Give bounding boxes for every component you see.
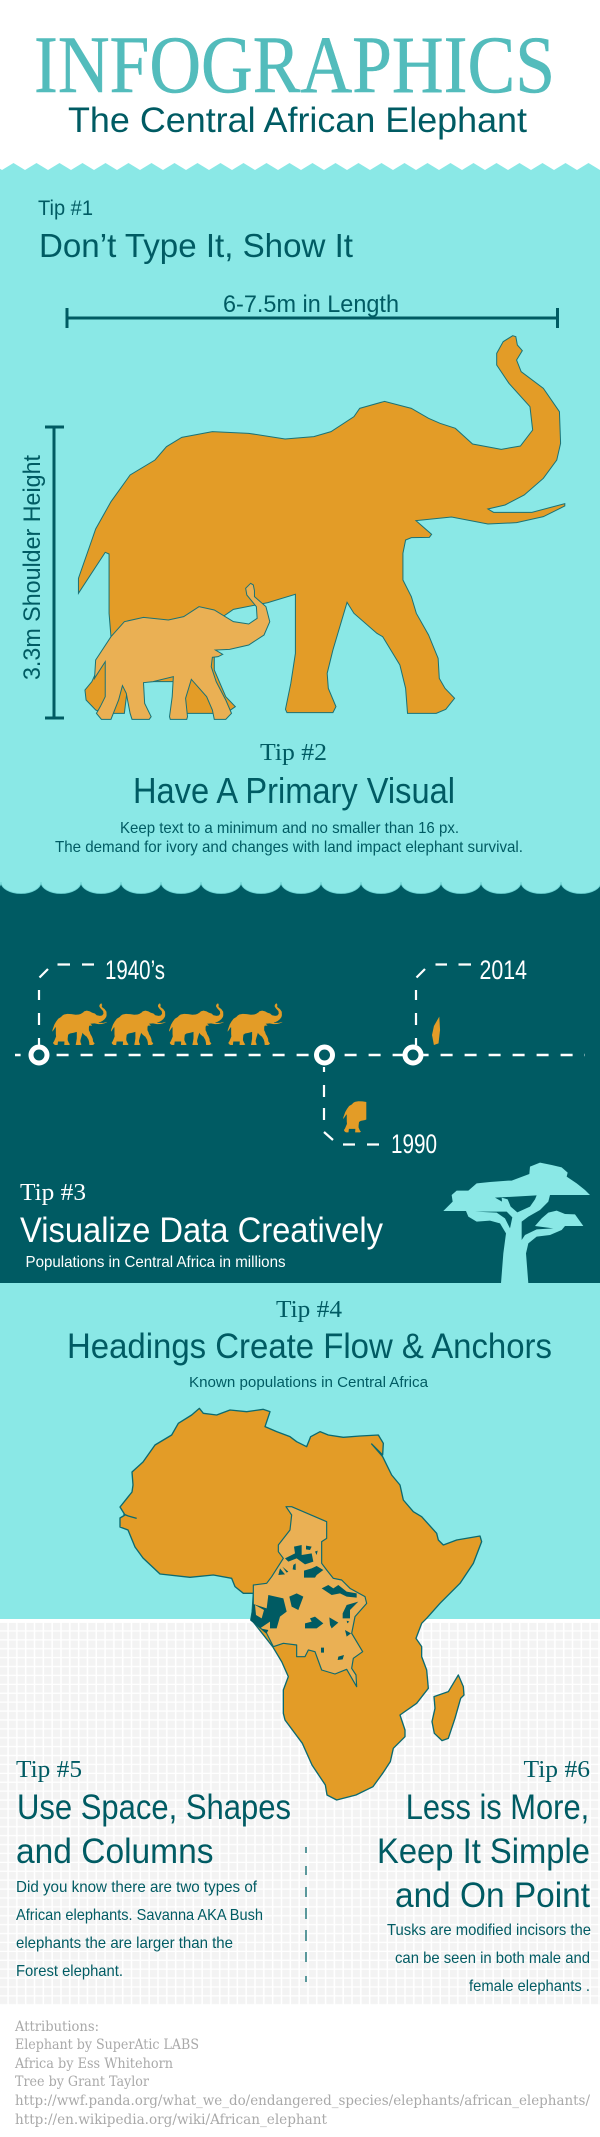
tip 4 heading: Headings Create Flow & Anchors — [67, 1327, 552, 1366]
tip 6 body: can be seen in both male and — [395, 1950, 590, 1967]
attributions: Tree by Grant Taylor — [15, 2074, 149, 2090]
label: 1990: 1990 — [391, 1129, 437, 1159]
map: Madagascar — [432, 1675, 464, 1741]
map: Africa — [120, 1408, 482, 1800]
column divider — [305, 1847, 307, 1982]
map: continent — [120, 1408, 482, 1800]
tip 1 heading: Don’t Type It, Show It — [39, 227, 353, 264]
tip 4 body: Known populations in Central Africa — [189, 1374, 429, 1391]
icon: acacia tree — [443, 1163, 590, 1283]
tip 5 heading: Use Space, Shapes — [17, 1788, 291, 1827]
tip 3 body: Populations in Central Africa in millions — [26, 1254, 286, 1271]
tip 5 heading: and Columns — [16, 1832, 214, 1871]
leader: 1940s — [39, 964, 94, 1045]
marker: 1940s — [31, 1047, 47, 1063]
leader: 2014 — [416, 964, 471, 1045]
panel: tip 2 — [55, 740, 523, 856]
tip 6 heading: and On Point — [395, 1876, 590, 1915]
panel: grid background — [0, 1623, 600, 2005]
map: elephant population areas — [251, 1545, 358, 1660]
tip 3 label: Tip #3 — [20, 1180, 86, 1206]
chart: population timeline — [15, 955, 585, 1159]
tip 6 heading: Keep It Simple — [377, 1832, 590, 1871]
panel: tip 1 — [19, 197, 558, 718]
tip 5 body — [16, 1879, 263, 1980]
panel: tip 5 — [16, 1757, 291, 1980]
length label: 6-7.5m in Length — [223, 291, 399, 318]
subtitle: The Central African Elephant — [68, 101, 527, 140]
label: 1940s: 1940’s — [105, 955, 165, 985]
attributions — [14, 2019, 590, 2128]
icons: 1940s elephants — [52, 1003, 282, 1045]
map: central Africa region — [251, 1507, 367, 1687]
attributions: Africa by Ess Whitehorn — [14, 2056, 173, 2072]
attributions: Elephant by SuperAtic LABS — [15, 2037, 199, 2053]
tip 6 label: Tip #6 — [524, 1757, 590, 1783]
tip 2 heading: Have A Primary Visual — [133, 770, 455, 811]
length arrow — [67, 308, 558, 328]
tip 5 body: African elephants. Savanna AKA Bush — [16, 1907, 263, 1924]
attributions: Attributions: — [14, 2019, 99, 2035]
tip 2 body — [55, 820, 523, 856]
white band across the page behind the map — [0, 1619, 600, 1623]
panel: tip 6 — [377, 1757, 591, 1995]
panel: tip 3 — [20, 1180, 383, 1271]
marker: 2014 — [405, 1047, 421, 1063]
tip 6 body — [387, 1922, 591, 1995]
tip 4 label: Tip #4 — [276, 1297, 342, 1323]
map: Gambia river line — [123, 1514, 137, 1518]
tip 2 body: The demand for ivory and changes with land impact elephant survival. — [55, 839, 523, 856]
icon: 2014 partial elephant — [432, 1017, 440, 1045]
icon: 1990 partial elephant — [343, 1101, 366, 1132]
tip 5 body: Forest elephant. — [16, 1963, 123, 1980]
tip 5 label: Tip #5 — [16, 1757, 82, 1783]
height arrow — [45, 427, 64, 718]
marker: 1990 — [316, 1047, 332, 1063]
icon: adult elephant — [78, 336, 565, 713]
panel: tip 4 — [67, 1297, 552, 1391]
tip 5 heading — [16, 1788, 291, 1871]
tip 6 heading — [377, 1788, 590, 1915]
timeline axis — [15, 1054, 585, 1056]
chart: elephant size comparison — [78, 336, 565, 719]
attributions: http://wwf.panda.org/what_we_do/endangered_species/elephants/african_elephants/ — [15, 2093, 590, 2109]
label: 2014: 2014 — [480, 955, 527, 985]
tip 5 body: elephants the are larger than the — [16, 1935, 233, 1952]
leader: 1990 — [324, 1067, 379, 1144]
attributions: http://en.wikipedia.org/wiki/African_elephant — [15, 2112, 327, 2128]
panel: dark timeline background — [0, 881, 600, 1283]
tip 6 body: female elephants . — [469, 1978, 590, 1995]
tip 3 heading: Visualize Data Creatively — [20, 1211, 383, 1250]
shoulder height label: 3.3m Shoulder Height — [19, 455, 46, 680]
tip 5 body: Did you know there are two types of — [16, 1879, 258, 1896]
panel: light teal tips 1 and 2 background — [0, 163, 600, 882]
panel: light teal map background — [0, 1283, 600, 1619]
panel: header — [34, 19, 555, 140]
map: light gap inside the largest area — [255, 1605, 264, 1618]
icon: baby elephant — [95, 583, 270, 719]
tip 2 label: Tip #2 — [260, 740, 327, 766]
tip 1 label: Tip #1 — [38, 197, 93, 220]
tip 2 body: Keep text to a minimum and no smaller than 16 px. — [120, 820, 459, 837]
